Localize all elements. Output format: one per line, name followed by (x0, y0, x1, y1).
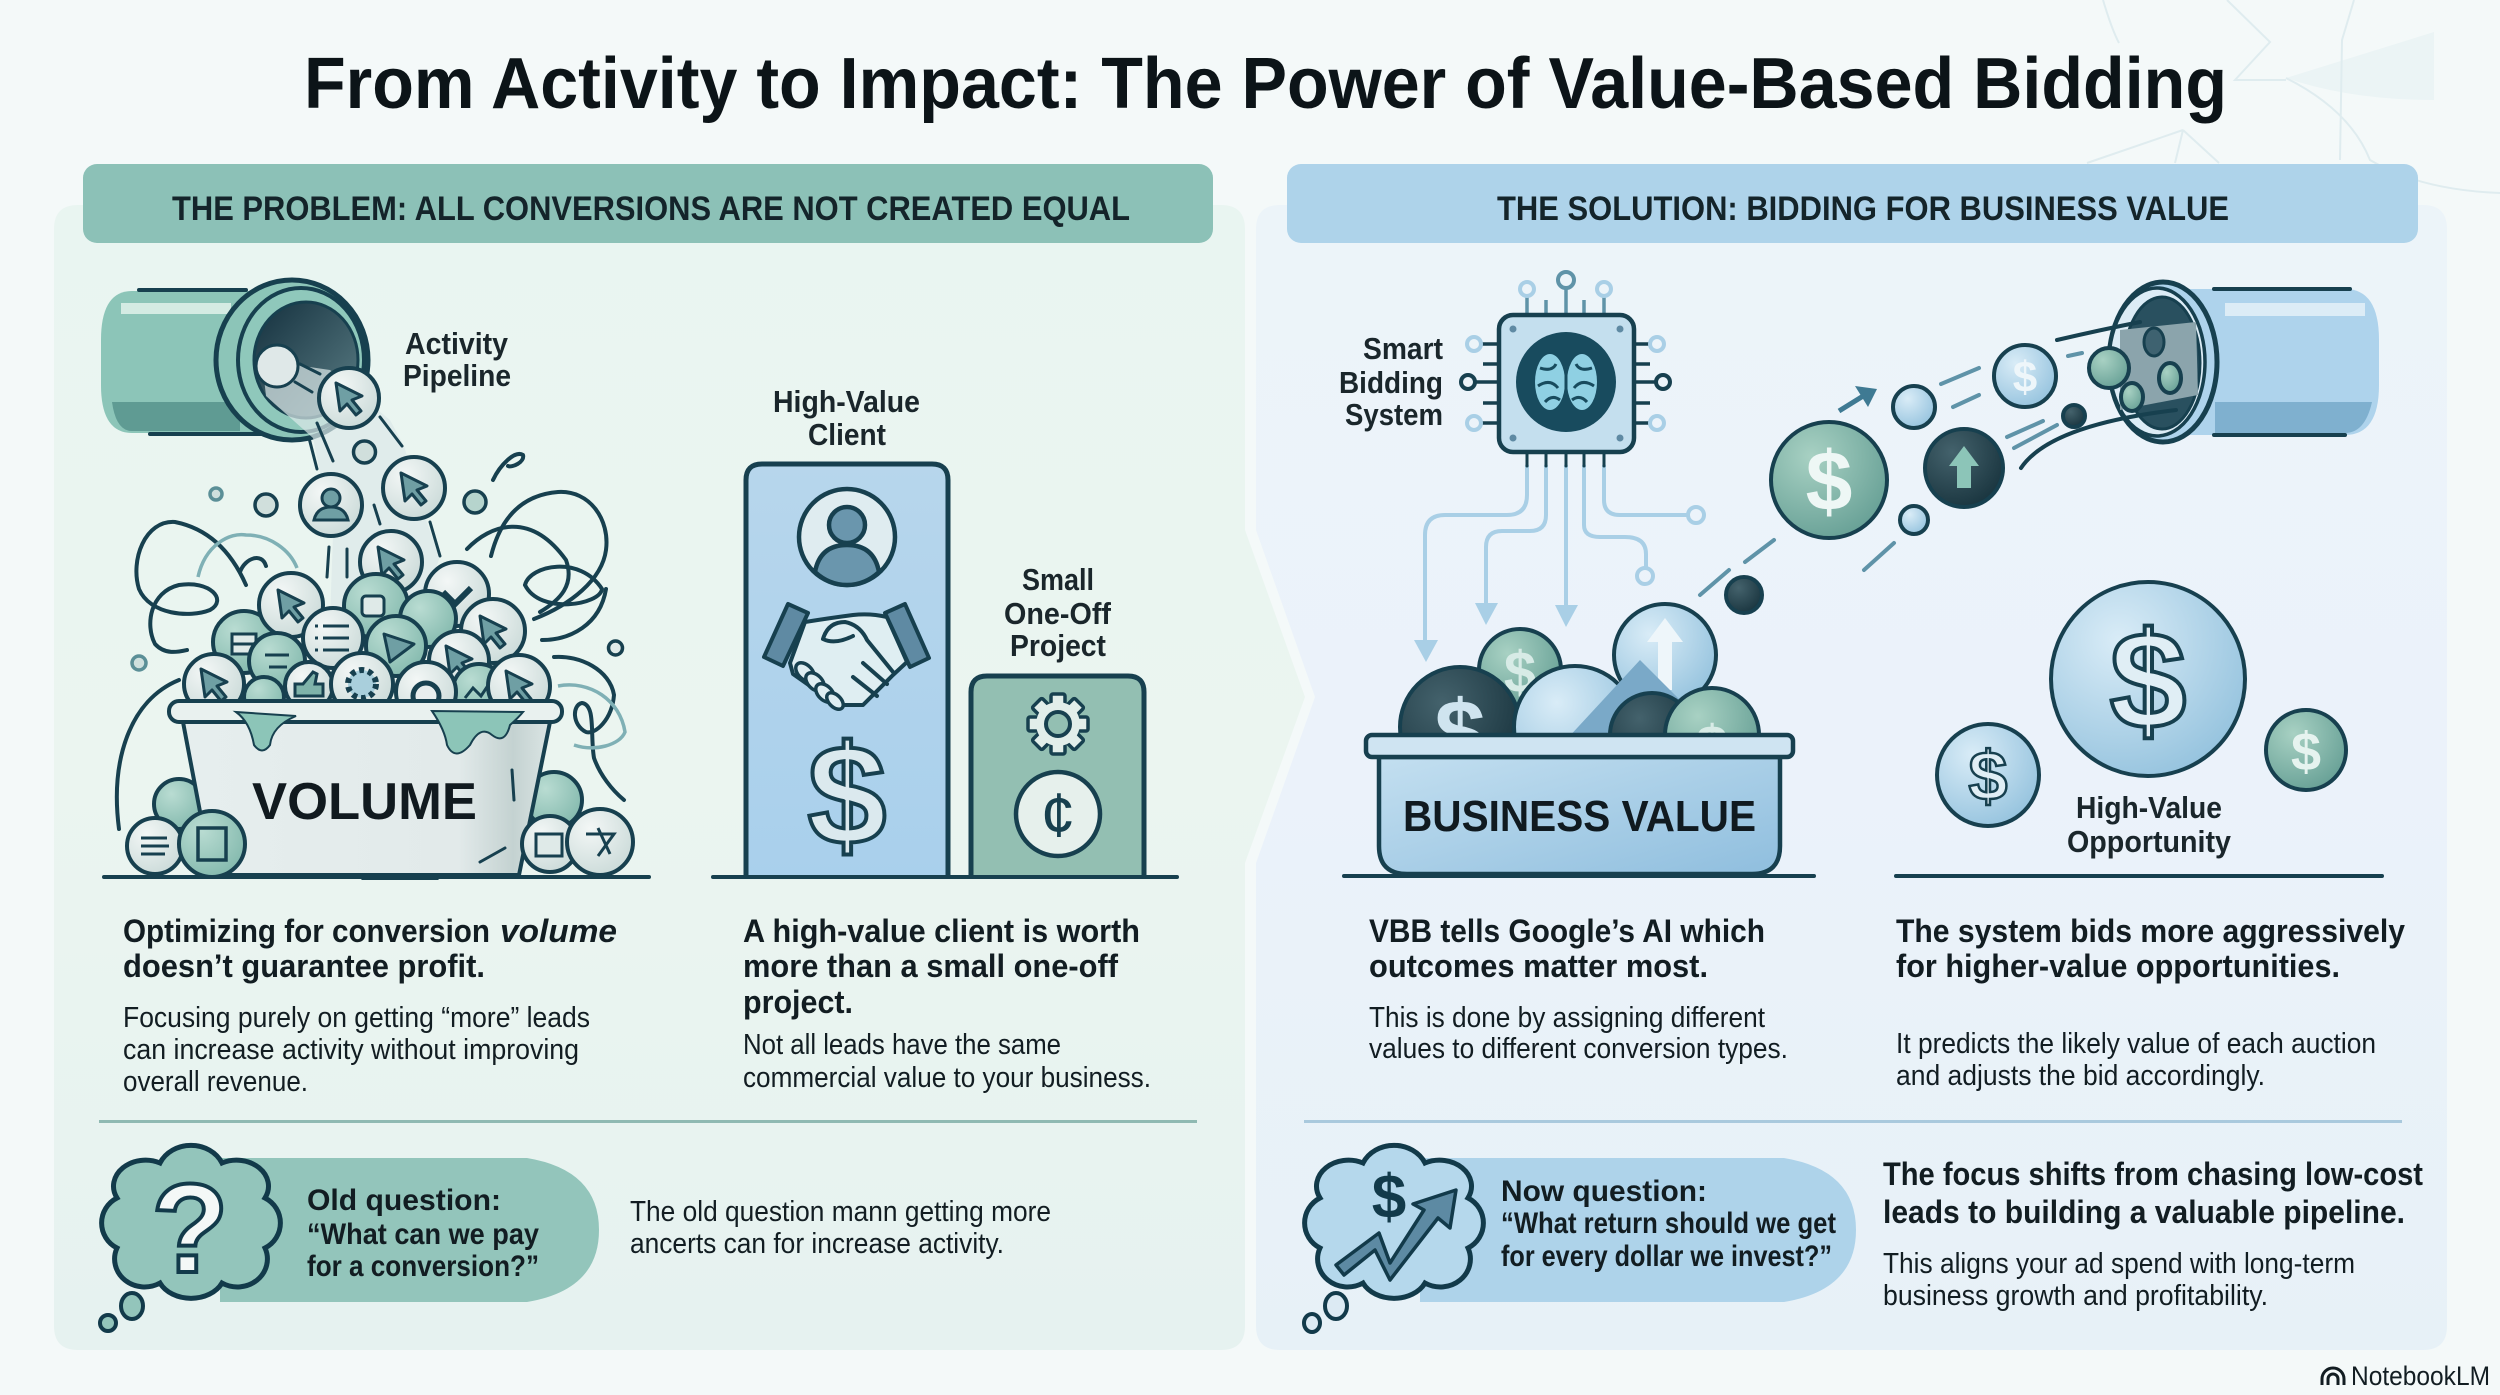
balls behind the bucket: $ (1504, 640, 1536, 705)
light connector lines with arrows (1414, 466, 1704, 662)
ground line (104, 875, 649, 879)
text block: focus shift (1883, 1156, 2423, 1312)
heading: the problem (83, 164, 1213, 243)
illustration: smart bidding into business value (1339, 272, 2379, 876)
bucket: business value: BUSINESS VALUE (1403, 792, 1756, 841)
icon: large dollar bubble: $ (2110, 604, 2186, 758)
bar: high-value client (746, 464, 948, 877)
label: smart bidding system: Bidding (1339, 365, 1443, 400)
text block: VBB tells AI: This is done by assigning different (1369, 1002, 1765, 1034)
icon: green dollar bubble (2266, 710, 2346, 790)
question text: Now question: (1501, 1175, 1707, 1208)
panel: the solution (1256, 205, 2447, 1350)
logo: NotebookLM: NotebookLM (2351, 1361, 2490, 1391)
activity stream (256, 345, 440, 620)
ground line (1896, 874, 2382, 878)
label: activity pipeline (403, 326, 511, 393)
label: small one-off project (1004, 562, 1112, 663)
text block: conversion volume: overall revenue. (123, 1066, 308, 1098)
text block: old question note: The old question mann getting more (630, 1196, 1051, 1228)
scribbles (117, 454, 625, 829)
text block: old question note: ancerts can for increase activity. (630, 1228, 1004, 1260)
heading: the solution: THE SOLUTION: BIDDING FOR BUSINESS VALUE (1497, 190, 2229, 228)
icon: thought cloud with rising arrow (1304, 1145, 1483, 1332)
label: smart bidding system (1339, 331, 1443, 432)
label: small one-off project: Small (1022, 562, 1094, 597)
icon: cent coin (1016, 772, 1100, 856)
label: high-value opportunity: High-Value (2076, 790, 2222, 825)
text block: VBB tells AI: outcomes matter most. (1369, 948, 1708, 984)
small rings (132, 441, 622, 670)
text block: conversion volume: Focusing purely on getting “more” leads (123, 1002, 590, 1034)
text block: high-value client (743, 913, 1151, 1094)
question text: for every dollar we invest?” (1501, 1240, 1832, 1273)
callout: old question (100, 1145, 599, 1331)
label: high-value client: High-Value (773, 384, 920, 419)
flying value balls: $ (1806, 434, 1852, 528)
ball pile (184, 562, 550, 722)
icon: dollar sign: $ (808, 716, 886, 875)
icon: large dollar bubble (2051, 582, 2245, 776)
heading: the problem: THE PROBLEM: ALL CONVERSIONS ARE NOT CREATED EQUAL (172, 190, 1130, 228)
question text (1501, 1175, 1836, 1273)
label: high-value opportunity: Opportunity (2067, 824, 2232, 859)
illustration: activity pipeline pouring into volume bucket (101, 280, 649, 878)
label: smart bidding system: Smart (1363, 331, 1443, 366)
question text: “What can we pay (307, 1218, 539, 1251)
question text (307, 1184, 539, 1283)
text block: focus shift: business growth and profitability. (1883, 1280, 2268, 1312)
text block: aggressive bidding: for higher-value opportunities. (1896, 948, 2340, 984)
icon: activity pipe (101, 280, 368, 440)
icon: right pipe (2109, 282, 2379, 442)
icon: small dollar bubble: $ (1969, 737, 2007, 815)
label: small one-off project: One-Off (1004, 596, 1112, 631)
question text: for a conversion?” (307, 1250, 539, 1283)
bar: small project (971, 676, 1144, 877)
text block: high-value client: A high-value client is worth (743, 913, 1140, 949)
illustration: high-value opportunity (1896, 582, 2382, 876)
text block: aggressive bidding: It predicts the likely value of each auction (1896, 1028, 2376, 1060)
illustration: client value comparison (713, 384, 1177, 877)
icon: front balls left and right (127, 809, 633, 877)
text block: conversion volume: volume (500, 913, 617, 949)
bucket: business value (1366, 735, 1793, 874)
flying value balls (1700, 322, 2176, 613)
icon: gear (1028, 694, 1088, 754)
background decoration (2087, 0, 2500, 193)
label: high-value client: Client (808, 417, 886, 452)
text block: VBB tells AI: VBB tells Google’s AI which (1369, 913, 1765, 949)
label: small one-off project: Project (1010, 628, 1106, 663)
text block: aggressive bidding: The system bids more aggressively (1896, 913, 2405, 949)
panel: the problem (54, 205, 1305, 1350)
text block: high-value client: project. (743, 984, 853, 1020)
icon: green dollar bubble: $ (2291, 722, 2321, 782)
bucket: volume (169, 701, 562, 875)
icon: thought cloud with question mark (100, 1145, 280, 1331)
title: From Activity to Impact: The Power of Value-Based Bidding (304, 44, 2227, 124)
text block: aggressive bidding: and adjusts the bid accordingly. (1896, 1060, 2265, 1092)
balls behind the bucket: $ (1696, 714, 1728, 779)
label: activity pipeline: Pipeline (403, 358, 511, 393)
icon: falling cursor and person balls (300, 368, 445, 593)
label: smart bidding system: System (1345, 397, 1443, 432)
ground line (713, 875, 1177, 879)
bucket: volume: VOLUME (252, 773, 477, 831)
text block: conversion volume: Optimizing for conversion (123, 913, 490, 949)
balls behind the bucket: $ (1434, 682, 1486, 784)
text block: focus shift: The focus shifts from chasing low-cost (1883, 1156, 2423, 1192)
label: activity pipeline: Activity (405, 326, 509, 361)
text block: high-value client: more than a small one-off (743, 948, 1118, 984)
icon: handshake (764, 604, 929, 712)
heading: the solution (1287, 164, 2418, 243)
text block: VBB tells AI (1369, 913, 1788, 1065)
icon: thought cloud with rising arrow: $ (1372, 1163, 1406, 1232)
callout: now question (1304, 1145, 1856, 1332)
text block: high-value client: commercial value to your business. (743, 1062, 1151, 1094)
back blobs behind bucket (154, 772, 582, 878)
icon: small dollar bubble (1937, 724, 2039, 826)
label: high-value client (773, 384, 920, 452)
text block: old question note (630, 1196, 1051, 1260)
text block: conversion volume: can increase activity without improving (123, 1034, 579, 1066)
flying value balls: $ (2013, 353, 2037, 402)
icon: person (799, 489, 895, 585)
text block: conversion volume: doesn’t guarantee profit. (123, 948, 485, 984)
text block: conversion volume (123, 913, 617, 1098)
ground line (1344, 874, 1814, 878)
icon: AI chip with brain (1461, 272, 1670, 466)
icon: cent coin: ¢ (1041, 781, 1075, 850)
text block: high-value client: Not all leads have the same (743, 1029, 1061, 1061)
text block: VBB tells AI: values to different conversion types. (1369, 1033, 1788, 1065)
label: high-value opportunity (2067, 790, 2232, 859)
icon: thought cloud with question mark: ? (152, 1158, 228, 1299)
question text: “What return should we get (1501, 1207, 1836, 1240)
pill (1420, 1158, 1856, 1302)
balls behind the bucket (1400, 604, 1759, 788)
text block: aggressive bidding (1896, 913, 2405, 1092)
text block: focus shift: leads to building a valuable pipeline. (1883, 1194, 2405, 1230)
question text: Old question: (307, 1184, 501, 1217)
text block: focus shift: This aligns your ad spend with long-term (1883, 1248, 2355, 1280)
pill (220, 1158, 599, 1302)
